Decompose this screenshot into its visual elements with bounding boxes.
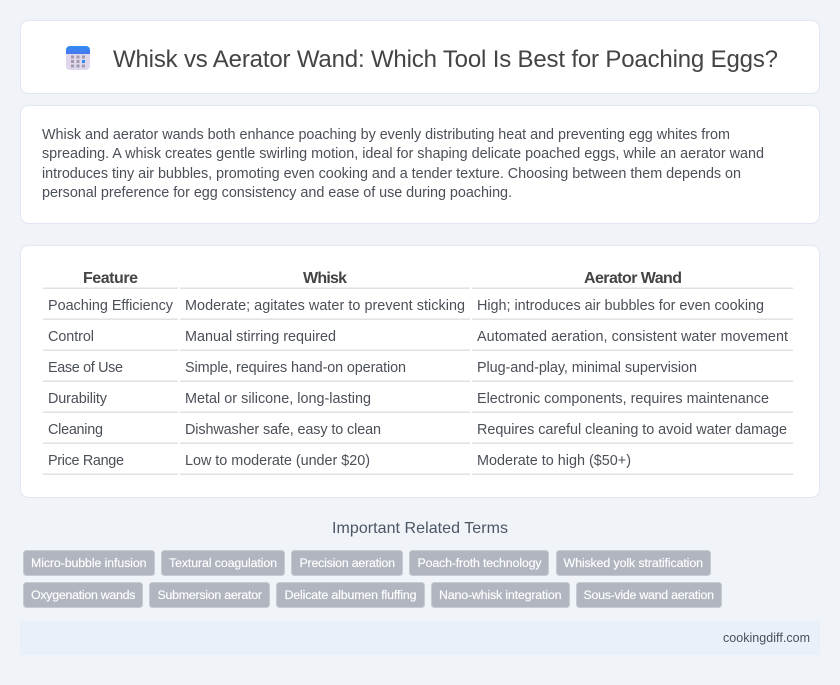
intro text block [42, 127, 764, 201]
tag: delicate albumen fluffing: Delicate albumen fluffing [284, 588, 417, 602]
tag: submersion aerator [150, 582, 270, 608]
row: ease of use [48, 360, 697, 376]
tag: poach-froth technology: Poach-froth technology [418, 556, 542, 570]
table header row: Feature [83, 270, 138, 287]
tag: oxygenation wands: Oxygenation wands [31, 588, 136, 602]
table header row: Whisk [303, 270, 347, 287]
title: Whisk vs Aerator Wand: Which Tool Is Best for Poaching Eggs? [113, 46, 778, 73]
tag: sous-vide wand aeration [576, 582, 722, 608]
row: price range [48, 453, 631, 469]
footer bar [20, 621, 820, 655]
header panel [20, 20, 820, 94]
tag: micro-bubble infusion [24, 550, 154, 576]
icon: calendar [66, 46, 90, 70]
tag: whisked yolk stratification [556, 550, 710, 576]
tag: submersion aerator: Submersion aerator [158, 588, 262, 602]
row: ease of use: Ease of Use [48, 360, 123, 376]
row: control [48, 329, 788, 345]
row: durability [48, 391, 769, 407]
table header row [83, 270, 682, 287]
row: control: Automated aeration, consistent water movement [477, 329, 788, 345]
row: cleaning: Cleaning [48, 422, 103, 438]
comparison table panel [20, 246, 820, 498]
row: durability: Metal or silicone, long-lasting [185, 391, 371, 407]
tag: textural coagulation: Textural coagulation [169, 556, 277, 570]
row: poaching efficiency: Moderate; agitates water to prevent sticking [185, 298, 465, 314]
row: poaching efficiency: Poaching Efficiency [48, 298, 174, 314]
tag: textural coagulation [162, 550, 284, 576]
footer source text: cookingdiff.com [723, 631, 810, 645]
row: price range: Low to moderate (under $20) [185, 453, 370, 469]
tag: sous-vide wand aeration: Sous-vide wand aeration [584, 588, 714, 602]
related terms heading: Important Related Terms [332, 520, 508, 537]
tag: oxygenation wands [24, 582, 142, 608]
row: control: Control [48, 329, 94, 345]
intro text block: introduces tiny air bubbles, promoting even cooking and a tender texture. Choosing between them depends on [42, 166, 741, 182]
intro text block: spreading. A whisk creates gentle swirling motion, ideal for shaping delicate poached eggs, while an aerator wand [42, 146, 764, 162]
tag: precision aeration [292, 550, 402, 576]
intro text block: Whisk and aerator wands both enhance poaching by evenly distributing heat and preventing egg whites from [42, 127, 730, 143]
row: durability: Durability [48, 391, 108, 407]
row: poaching efficiency [48, 298, 764, 314]
row: control: Manual stirring required [185, 329, 336, 345]
row: durability: Electronic components, requires maintenance [477, 391, 769, 407]
tag: precision aeration: Precision aeration [300, 556, 395, 570]
row: price range: Price Range [48, 453, 124, 469]
intro panel [20, 106, 820, 224]
tag: delicate albumen fluffing [276, 582, 424, 608]
row: cleaning: Requires careful cleaning to avoid water damage [477, 422, 787, 438]
row: cleaning [48, 422, 787, 438]
table header row: Aerator Wand [584, 270, 682, 287]
row: ease of use: Plug-and-play, minimal supervision [477, 360, 697, 376]
tag: micro-bubble infusion: Micro-bubble infusion [31, 556, 147, 570]
tag: nano-whisk integration [432, 582, 570, 608]
related terms tags [24, 550, 722, 608]
row: cleaning: Dishwasher safe, easy to clean [185, 422, 381, 438]
tag: poach-froth technology [410, 550, 548, 576]
row: price range: Moderate to high ($50+) [477, 453, 631, 469]
row: poaching efficiency: High; introduces air bubbles for even cooking [477, 298, 764, 314]
intro text block: personal preference for egg consistency and ease of use during poaching. [42, 185, 512, 201]
tag: whisked yolk stratification: Whisked yolk stratification [564, 556, 703, 570]
tag: nano-whisk integration: Nano-whisk integration [439, 588, 562, 602]
row: ease of use: Simple, requires hand-on operation [185, 360, 406, 376]
